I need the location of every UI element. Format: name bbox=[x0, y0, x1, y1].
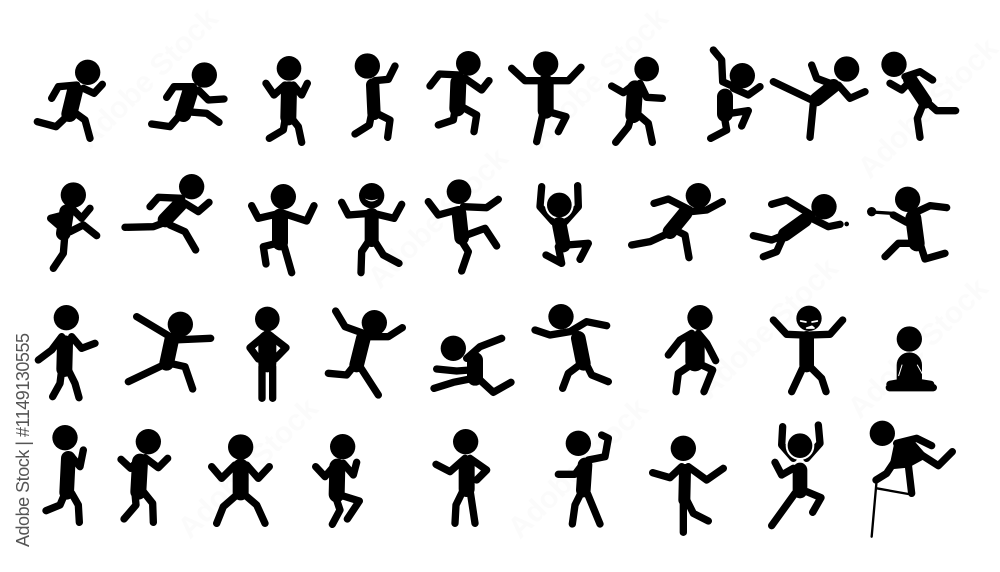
figure: jumping arms up bbox=[328, 310, 402, 395]
figure: wide lunge arms spread bbox=[128, 312, 211, 389]
figure: hopping bbox=[316, 434, 359, 524]
figure: floor split bbox=[434, 336, 511, 392]
figure: walking relaxed bbox=[38, 305, 95, 398]
row 3 right figures bbox=[535, 304, 933, 392]
faint stock watermarks: Adobe Stock bbox=[692, 252, 845, 405]
row 4 right figures bbox=[558, 421, 952, 537]
figure: walking side bbox=[612, 57, 662, 142]
icon: smile bbox=[366, 199, 378, 201]
figure: jumping with arms overhead bbox=[772, 425, 821, 526]
figure: one leg raised bbox=[512, 51, 581, 142]
figure: walking hands clasped bbox=[46, 425, 83, 522]
vertical stock id text: Adobe Stock | #1149130555 bbox=[13, 333, 33, 547]
figure: meditative hands dancer bbox=[428, 179, 498, 271]
figure: hands on hips bbox=[250, 307, 286, 398]
figure: arm bent overhead bbox=[558, 431, 608, 524]
faint stock watermarks: Adobe Stock bbox=[502, 392, 655, 545]
figure: hurdler bbox=[870, 421, 952, 537]
figure: standing with raised hands bbox=[266, 56, 307, 142]
figure: arm raised jump bbox=[711, 50, 760, 138]
faint stock watermarks: Adobe Stock bbox=[842, 272, 995, 425]
figure: runner 1 bbox=[37, 60, 102, 138]
icon: angry face bbox=[801, 321, 817, 328]
faint stock watermarks: Adobe Stock bbox=[522, 2, 675, 155]
figure: squatting stance bbox=[668, 305, 716, 392]
row 2 right figures bbox=[540, 183, 947, 263]
figure: meditating bbox=[889, 326, 933, 388]
figure: hand on hip bbox=[436, 429, 487, 523]
row 3 left figures bbox=[38, 305, 511, 398]
figure: high kick bbox=[773, 56, 865, 137]
faint stock watermarks: Adobe Stock bbox=[362, 142, 515, 295]
row 1 left figures bbox=[37, 51, 489, 142]
figure: singer with microphone bbox=[867, 187, 947, 259]
figure: runner 2 bbox=[152, 62, 224, 127]
figure: angry cheering bbox=[773, 306, 843, 392]
figure: leaping runner bbox=[125, 174, 209, 250]
figure: diving forward bbox=[753, 194, 849, 257]
figure: bending forward bbox=[881, 52, 956, 137]
figure: hands up step bbox=[121, 429, 168, 522]
figure: striding arms out bbox=[430, 51, 489, 132]
hurdle bar bbox=[872, 480, 908, 537]
figure: shrugging on one leg bbox=[653, 436, 723, 532]
figure: wide stance bbox=[212, 434, 269, 523]
figure: knee up, hand on hip bbox=[51, 182, 97, 268]
figure: smiling dancer bbox=[342, 183, 402, 273]
row 2 left figures bbox=[51, 174, 498, 273]
row 1 right figures bbox=[512, 50, 956, 142]
figure: lunging runner bbox=[632, 183, 722, 258]
figure: arms up jump bbox=[540, 186, 588, 263]
faint stock watermarks: Adobe Stock bbox=[172, 392, 325, 545]
row 4 left figures bbox=[46, 425, 487, 524]
faint stock watermarks: Adobe Stock bbox=[72, 2, 225, 155]
figure: standing arms raised, knee bent bbox=[252, 184, 314, 273]
figure: waving stride bbox=[355, 53, 395, 137]
figure: stumbling run bbox=[535, 304, 608, 388]
